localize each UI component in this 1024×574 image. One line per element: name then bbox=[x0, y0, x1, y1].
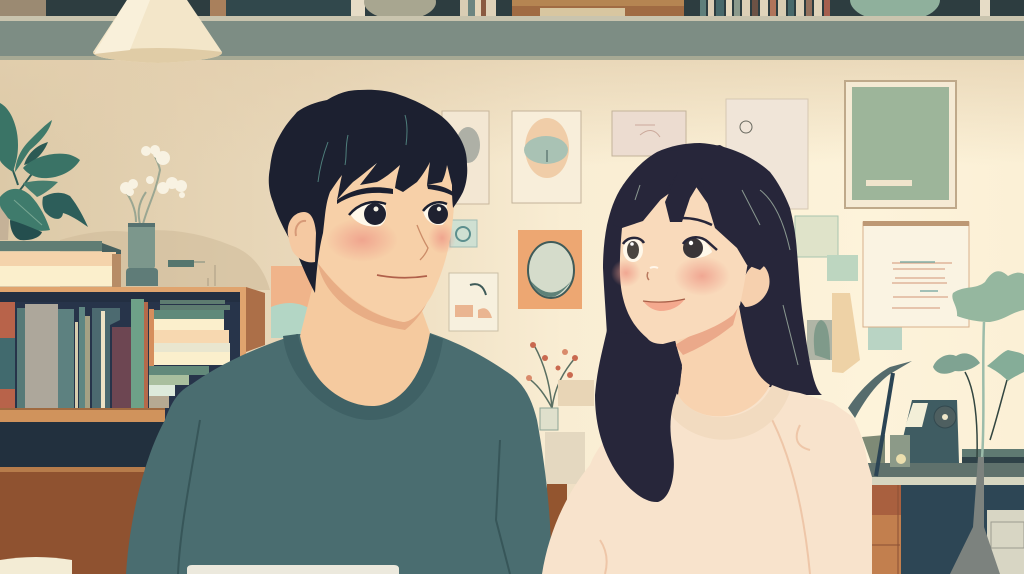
wall bbox=[0, 55, 1024, 475]
man: nose and mouth bbox=[377, 225, 428, 278]
cup in foreground bbox=[0, 557, 72, 574]
woman: collar bbox=[664, 385, 790, 440]
desk and equipment on the right bbox=[848, 361, 1024, 574]
small flower arrangement behind couple bbox=[526, 342, 594, 574]
woman: hair highlights bbox=[635, 185, 798, 365]
laptop edge in foreground bbox=[187, 565, 399, 574]
potted plant on the right bbox=[933, 271, 1024, 574]
woman: eyes bbox=[623, 237, 717, 262]
man bbox=[126, 90, 551, 574]
man: sweater bbox=[126, 333, 551, 574]
man: neck shadow bbox=[318, 263, 430, 330]
woman: neck bbox=[675, 300, 770, 416]
woman: back hair bbox=[603, 143, 822, 395]
pendant lamp bbox=[93, 0, 222, 63]
woman: neck shadow bbox=[675, 307, 738, 355]
top shelf with books bbox=[0, 0, 1024, 60]
woman: nose and mouth bbox=[643, 267, 685, 311]
man: face bbox=[316, 160, 454, 322]
woman bbox=[542, 143, 872, 574]
woman: fringe hair bbox=[613, 145, 790, 270]
man: ear bbox=[288, 212, 316, 262]
man: neck bbox=[300, 265, 430, 408]
woman: face bbox=[620, 178, 748, 344]
flowers in a vase bbox=[120, 145, 215, 286]
woman: sweater bbox=[542, 387, 872, 574]
man: cheeks bbox=[326, 218, 456, 262]
art prints on the wall bbox=[271, 81, 969, 373]
man: hair highlights bbox=[318, 115, 407, 182]
woman: front hair lock bbox=[595, 330, 682, 502]
potted plant on the left bbox=[0, 103, 88, 240]
man: eyes bbox=[349, 202, 448, 226]
stack of books on the shelf bbox=[0, 241, 121, 287]
woman: eyebrow bbox=[682, 218, 712, 225]
woman: cheeks bbox=[611, 256, 730, 296]
woman: ear bbox=[740, 263, 770, 307]
man: hair bbox=[269, 90, 467, 293]
lower cabinet bbox=[0, 422, 165, 574]
man: collar bbox=[283, 334, 443, 420]
bookcase bbox=[0, 287, 265, 422]
man: eyebrows bbox=[337, 185, 453, 204]
